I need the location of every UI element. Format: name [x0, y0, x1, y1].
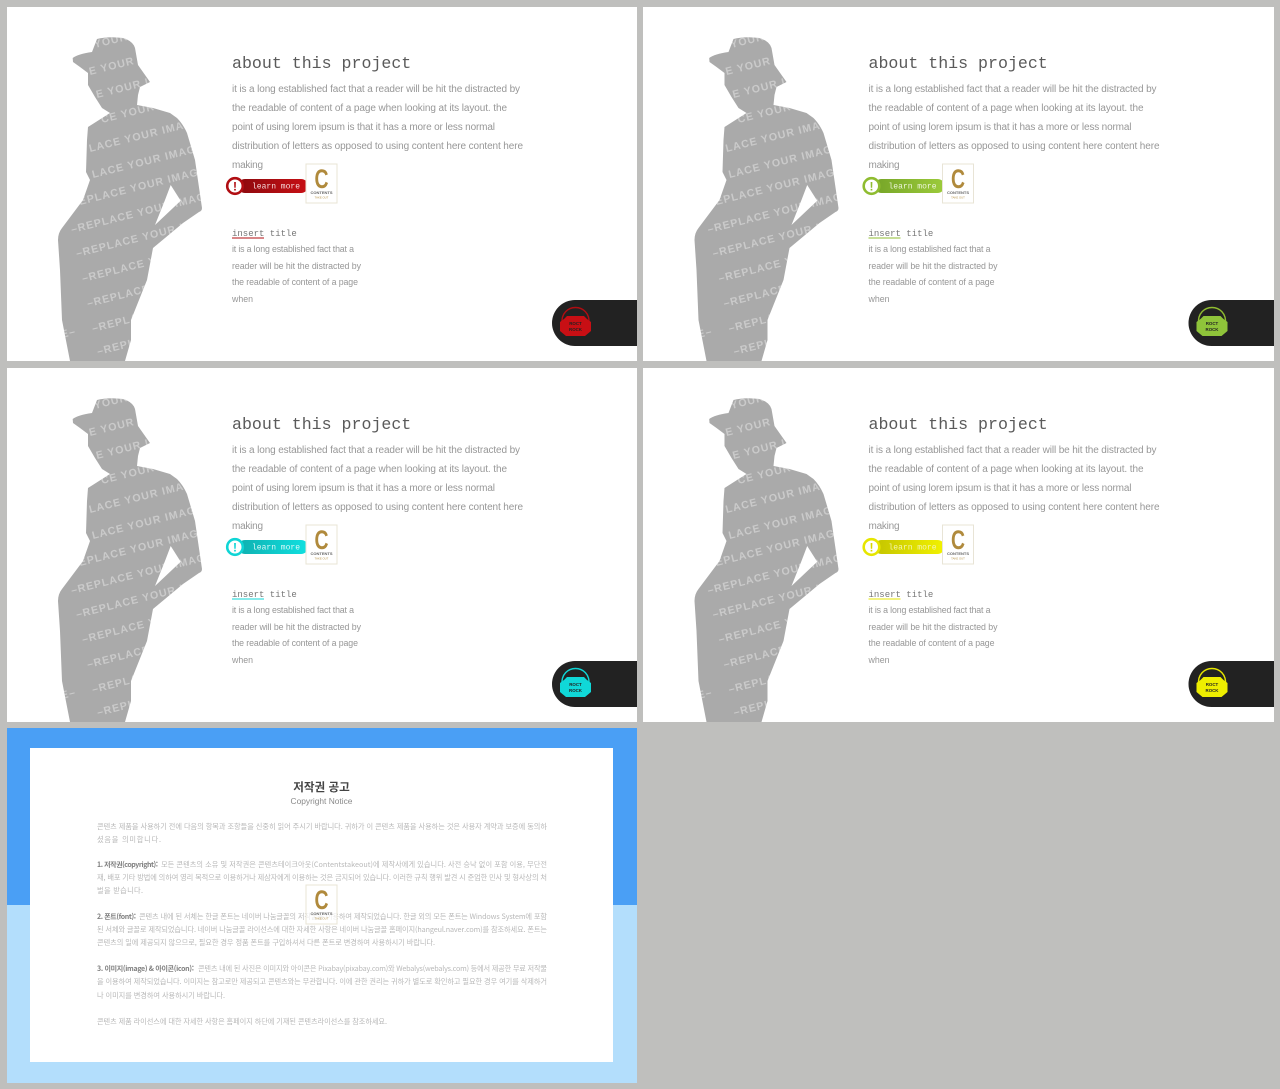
silhouette with watermark: YOUR IMAGE [93, 20, 172, 51]
subheading: insert title: insert title [232, 229, 297, 239]
silhouette with watermark: –REPLACE YOUR IMAGE [70, 550, 215, 597]
body text: it is a long established fact that a reader will be hit the distracted by [868, 445, 1156, 456]
silhouette with watermark: LACE YOUR IMAGE [91, 141, 205, 181]
button: learn more: learn more [888, 182, 937, 192]
subheading: insert title: insert title [868, 229, 933, 239]
logo: contents: CONTENTS [310, 551, 333, 556]
button: learn more: learn more [252, 182, 300, 192]
black tab with headphone icon: ROCT [569, 321, 582, 326]
button: learn more: ! [870, 540, 874, 554]
silhouette with watermark: E– [60, 326, 77, 341]
silhouette with watermark: EPLACE YOUR IMAGE [78, 165, 208, 208]
silhouette with watermark: –REPLACE YOUR IMAGE [81, 238, 226, 285]
body text: the readable of content of a page when looking at its layout. the [868, 464, 1144, 475]
section 2: font: 콘텐츠의 일에 제공되지 않으므로, 필요한 경우 정품 폰트를 구입하셔서 다른 폰트로 변경하여 사용하시기 바랍니다. [97, 938, 435, 948]
button: learn more [227, 539, 308, 555]
silhouette with watermark [58, 398, 202, 722]
subheading: insert title: insert title [868, 590, 933, 600]
silhouette with watermark: E– [60, 687, 77, 702]
body text [232, 84, 523, 171]
button: learn more [227, 178, 308, 194]
silhouette with watermark: YOUR IMAGE [729, 381, 808, 412]
silhouette with watermark: –REPLACE YOUR IMAGE [86, 624, 231, 671]
silhouette with watermark: –REPLACE YOUR IMAGE [706, 550, 851, 597]
button: learn more: learn more [888, 544, 937, 552]
body text: distribution of letters as opposed to using content here content here [868, 502, 1160, 513]
silhouette with watermark [694, 37, 838, 361]
section 3: image and icon: 콘텐츠 내에 된 사진은 이미지와 아이콘은 Pixabay(pixabay.com)와 Webalys(webalys.com) 등에서 제공한 무료 저작물 [198, 964, 547, 974]
silhouette with watermark: –REPLACE YOUR IMAGE [81, 599, 226, 646]
logo: contents: C [951, 525, 965, 555]
body text: the readable of content of a page when looking at its layout. the [232, 103, 507, 114]
section 1: copyright: 모든 콘텐츠의 소유 및 저작권은 콘텐츠테이크아웃(Contentstakeout)에 제작사에게 있습니다. 사전 승낙 없이 포함 이용, 무단전 [161, 860, 547, 870]
body text: the readable of content of a page when looking at its layout. the [232, 464, 507, 475]
panel: red slide [7, 7, 637, 361]
small text: it is a long established fact that a [232, 605, 354, 615]
intro text: 콘텐츠 제품을 사용하기 전에 다음의 항목과 조항들을 신중히 읽어 주시기 바랍니다. 귀하가 이 콘텐츠 제품을 사용하는 것은 사용자 계약과 보증에 동의하 [97, 822, 547, 832]
small text [868, 605, 998, 665]
silhouette with watermark: –REPLACE YOUR IMAGE [732, 672, 877, 719]
small text [868, 244, 998, 304]
small text: it is a long established fact that a [232, 244, 354, 254]
panel: copyright notice [7, 728, 637, 1083]
intro text: 셨음을 의미합니다. [97, 835, 161, 845]
section 2: font [97, 912, 547, 948]
silhouette with watermark: –REPLACE YOUR IMAGE [91, 288, 236, 335]
silhouette with watermark: E YOUR IMAGE [724, 44, 815, 78]
button: learn more [864, 539, 944, 555]
small text: it is a long established fact that a [868, 244, 991, 254]
small text: the readable of content of a page [232, 277, 358, 287]
silhouette with watermark: CE YOUR IMAGE [736, 90, 835, 126]
small text: it is a long established fact that a [868, 605, 991, 615]
logo: contents overlay: CONTENTS [310, 911, 333, 916]
silhouette with watermark: –REPLACE YOUR IMAGE [91, 649, 236, 696]
silhouette with watermark: –REPLACE YOUR IMAGE [86, 263, 231, 310]
body text [868, 445, 1160, 532]
subheading: insert title: insert title [232, 590, 297, 600]
silhouette with watermark: YOUR IMAGE [729, 20, 808, 51]
black tab with headphone icon [1188, 300, 1274, 346]
section 2: font: 2. 폰트(font): [97, 912, 136, 922]
small text: when [868, 294, 890, 304]
body text: making [232, 521, 263, 532]
silhouette with watermark: E YOUR IMAGE [731, 428, 822, 462]
logo: contents: CONTENTS [310, 190, 333, 195]
logo: contents overlay [306, 885, 337, 924]
logo: contents [306, 525, 337, 564]
silhouette with watermark: LACE YOUR IMAGE [88, 115, 202, 155]
black tab with headphone icon: ROCT [569, 682, 582, 687]
body text: point of using lorem ipsum is that it has a more or less normal [868, 483, 1132, 494]
silhouette with watermark: –REPLACE YOUR IMAGE [727, 288, 872, 335]
section 3: image and icon: 3. 이미지(image) & 아이콘(icon): [97, 964, 194, 974]
button: learn more: learn more [252, 544, 300, 552]
silhouette with watermark: –REPLACE YOUR IMAGE [722, 624, 867, 671]
black tab with headphone icon: ROCK [1206, 327, 1219, 332]
logo: contents: CONTENTS [947, 551, 969, 556]
section 1: copyright: 1. 저작권(copyright): [97, 860, 158, 870]
body text: making [868, 160, 900, 171]
small text [231, 605, 362, 665]
silhouette with watermark: EPLACE YOUR IMAGE [78, 526, 208, 569]
section 2: font: 된 서체와 글꼴로 제작되었습니다. 네이버 나눔글꼴 라이선스에 대한 자세한 사항은 네이버 나눔글꼴 홈페이지(hangeul.naver.com)를 참조하세요. 폰트는 [97, 925, 547, 935]
body text: it is a long established fact that a reader will be hit the distracted by [232, 84, 520, 95]
black tab with headphone icon: ROCK [569, 327, 583, 332]
intro text [97, 822, 547, 845]
heading: about this project [868, 415, 1048, 434]
section 1: copyright [97, 860, 547, 896]
body text: the readable of content of a page when looking at its layout. the [868, 103, 1144, 114]
silhouette with watermark: E YOUR IMAGE [731, 67, 822, 101]
small text: the readable of content of a page [232, 638, 358, 648]
silhouette with watermark: CE YOUR IMAGE [100, 90, 199, 126]
section 1: copyright: 재, 배포 기타 방법에 의하여 영리 목적으로 이용하거나 제삼자에게 이용하는 것은 금지되어 있습니다. 이러한 규칙 행위 발견 시 준엄한 민사 및 형사상의 처 [97, 873, 547, 883]
section 1: copyright: 벌을 받습니다. [97, 886, 143, 896]
panel: yellow slide [643, 368, 1274, 722]
silhouette with watermark: –REPLACE YOUR IMAGE [717, 238, 862, 285]
black tab with headphone icon [552, 300, 637, 346]
panel: cyan slide [7, 368, 637, 722]
silhouette with watermark: EPLACE YOUR IMAGE [714, 165, 844, 208]
body text: distribution of letters as opposed to using content here content here [868, 141, 1160, 152]
section 2: font: 콘텐츠 내에 된 서체는 한글 폰트는 네이버 나눔글꼴의 저작물을 이용하여 제작되었습니다. 한글 외의 모든 폰트는 Windows System에 포함 [139, 912, 547, 922]
silhouette with watermark: –REPLACE YOUR IMAGE [722, 263, 867, 310]
body text: point of using lorem ipsum is that it has a more or less normal [232, 483, 495, 494]
silhouette with watermark: –REPLACE YOUR IMAGE [727, 649, 872, 696]
silhouette with watermark: –REPLACE YOUR IMAGE [711, 213, 856, 260]
body text: it is a long established fact that a reader will be hit the distracted by [232, 445, 520, 456]
small text: when [231, 655, 253, 665]
silhouette with watermark: E YOUR IMAGE [95, 67, 185, 101]
button: learn more: ! [870, 180, 874, 194]
body text: making [232, 160, 263, 171]
logo: contents [306, 164, 337, 203]
silhouette with watermark: –REPLACE YOUR IMAGE [717, 599, 862, 646]
logo: contents: TAKE OUT [951, 196, 965, 200]
silhouette with watermark: –REPLACE YOUR IMAGE [706, 189, 851, 236]
silhouette with watermark: –REPLACE YOUR IMAGE [70, 189, 215, 236]
panel: green slide [643, 7, 1274, 361]
body text: distribution of letters as opposed to using content here content here [232, 141, 523, 152]
small text: reader will be hit the distracted by [232, 622, 362, 632]
copyright subtitle: Copyright Notice [291, 796, 353, 806]
silhouette with watermark: CE YOUR IMAGE [100, 451, 199, 487]
body text [232, 445, 523, 532]
logo: contents overlay: C [314, 885, 329, 915]
silhouette with watermark: –REPLACE YOUR IMAGE [711, 574, 856, 621]
section 3: image and icon: 을 이용하여 제작되었습니다. 이미지는 참고로만 제공되고 콘텐츠와는 무관합니다. 이에 관한 권리는 귀하가 별도로 확인하고 필요한 경우 여기를 삭제하거 [97, 977, 547, 987]
body text: distribution of letters as opposed to using content here content here [232, 502, 523, 513]
small text [231, 244, 362, 304]
silhouette with watermark: –REPLACE YOUR IMAGE [75, 574, 220, 621]
black tab with headphone icon: ROCT [1206, 682, 1219, 687]
button: learn more: ! [233, 180, 237, 194]
body text: it is a long established fact that a reader will be hit the distracted by [868, 84, 1156, 95]
logo: contents: CONTENTS [947, 190, 969, 195]
closing line: 콘텐츠 제품 라이선스에 대한 자세한 사항은 홈페이지 하단에 기재된 콘텐츠라이선스를 참조하세요. [97, 1017, 387, 1027]
body text: point of using lorem ipsum is that it has a more or less normal [232, 122, 495, 133]
black tab with headphone icon [552, 661, 637, 707]
silhouette with watermark: E– [696, 326, 714, 341]
heading: about this project [232, 54, 411, 73]
logo: contents overlay: TAKE OUT [315, 916, 329, 920]
heading: about this project [868, 54, 1048, 73]
logo: contents: C [314, 164, 329, 194]
silhouette with watermark: –REPLACE YOUR IMAGE [75, 213, 220, 260]
logo: contents: C [951, 164, 965, 194]
logo: contents: TAKE OUT [315, 556, 329, 560]
small text: reader will be hit the distracted by [232, 261, 362, 271]
silhouette with watermark: E YOUR IMAGE [88, 44, 178, 78]
section 3: image and icon: 나 이미지를 변경하여 사용하시기 바랍니다. [97, 991, 225, 1001]
body text [868, 84, 1160, 171]
silhouette with watermark: –REPLACE YOUR IMAGE [96, 672, 241, 719]
silhouette with watermark: LACE YOUR IMAGE [724, 476, 839, 516]
silhouette with watermark: CE YOUR IMAGE [736, 451, 835, 487]
silhouette with watermark [694, 398, 838, 722]
small text: the readable of content of a page [868, 277, 995, 287]
body text: point of using lorem ipsum is that it has a more or less normal [868, 122, 1132, 133]
black tab with headphone icon [1188, 661, 1274, 707]
small text: the readable of content of a page [868, 638, 995, 648]
silhouette with watermark: YOUR IMAGE [93, 381, 172, 412]
section 3: image and icon [97, 964, 547, 1001]
logo: contents: TAKE OUT [951, 556, 965, 560]
black tab with headphone icon: ROCT [1206, 321, 1219, 326]
silhouette with watermark: LACE YOUR IMAGE [727, 141, 842, 181]
logo: contents [942, 525, 974, 564]
silhouette with watermark: LACE YOUR IMAGE [727, 502, 842, 542]
body text: making [868, 521, 900, 532]
silhouette with watermark: E YOUR IMAGE [88, 405, 178, 439]
silhouette with watermark: E YOUR IMAGE [724, 405, 815, 439]
copyright title: 저작권 공고 [293, 780, 350, 794]
logo: contents: C [314, 525, 329, 555]
small text: when [868, 655, 890, 665]
silhouette with watermark: EPLACE YOUR IMAGE [714, 526, 844, 569]
silhouette with watermark: E YOUR IMAGE [95, 428, 185, 462]
small text: reader will be hit the distracted by [868, 622, 998, 632]
silhouette with watermark: E– [696, 687, 714, 702]
button: learn more [864, 178, 944, 194]
silhouette with watermark: LACE YOUR IMAGE [724, 115, 839, 155]
logo: contents [942, 164, 974, 203]
silhouette with watermark: –REPLACE YOUR IMAGE [732, 311, 877, 358]
black tab with headphone icon: ROCK [569, 688, 583, 693]
silhouette with watermark: LACE YOUR IMAGE [91, 502, 205, 542]
small text: when [231, 294, 253, 304]
silhouette with watermark: LACE YOUR IMAGE [88, 476, 202, 516]
silhouette with watermark [58, 37, 202, 361]
small text: reader will be hit the distracted by [868, 261, 998, 271]
logo: contents: TAKE OUT [315, 196, 329, 200]
black tab with headphone icon: ROCK [1206, 688, 1219, 693]
silhouette with watermark: –REPLACE YOUR IMAGE [96, 311, 241, 358]
heading: about this project [232, 415, 411, 434]
button: learn more: ! [233, 540, 237, 554]
